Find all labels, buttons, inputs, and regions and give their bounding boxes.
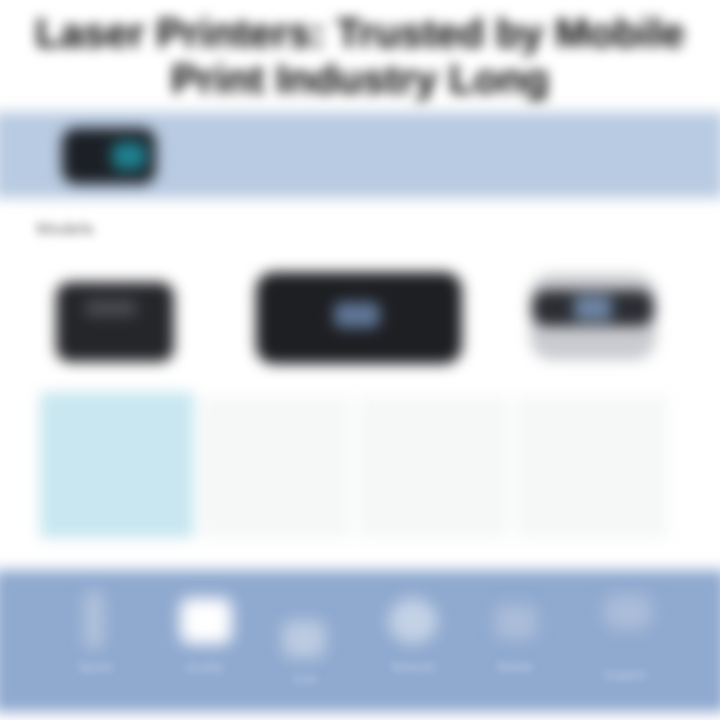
table column two xyxy=(358,396,508,538)
icon: printer three xyxy=(530,274,656,360)
icon: printer two xyxy=(256,272,462,364)
feature label: three: Cost xyxy=(293,672,317,686)
section label: Models xyxy=(36,219,94,239)
panel: top banner xyxy=(0,112,720,198)
icon: teal screen xyxy=(112,142,146,170)
title: Print Industry Long xyxy=(171,56,549,102)
printer one panel xyxy=(86,300,136,316)
comparison table xyxy=(33,385,657,545)
feature icon: four xyxy=(388,598,438,644)
table column one xyxy=(202,396,350,538)
printer two screen xyxy=(334,302,380,328)
feature label: six: Support xyxy=(604,668,646,682)
printer three dark band xyxy=(532,290,654,326)
feature label: five: Mobile xyxy=(497,660,533,674)
icon: printer in banner xyxy=(62,128,156,184)
title xyxy=(28,8,692,110)
feature label: four: Network xyxy=(391,660,435,674)
icon: printer one xyxy=(56,282,174,362)
feature icon: five xyxy=(494,604,538,640)
printer three screen xyxy=(574,296,612,320)
feature icon: one xyxy=(84,590,104,650)
table header column xyxy=(40,392,194,538)
table column three xyxy=(516,396,668,538)
title: Laser Printers: Trusted by Mobile xyxy=(35,10,685,56)
panel: bottom feature band xyxy=(0,570,720,712)
feature icon: two xyxy=(180,598,232,644)
feature label: one: Speed xyxy=(78,660,112,674)
feature label: two: Quality xyxy=(186,660,224,674)
feature icon: three xyxy=(282,620,326,658)
feature icon: six xyxy=(604,594,652,630)
